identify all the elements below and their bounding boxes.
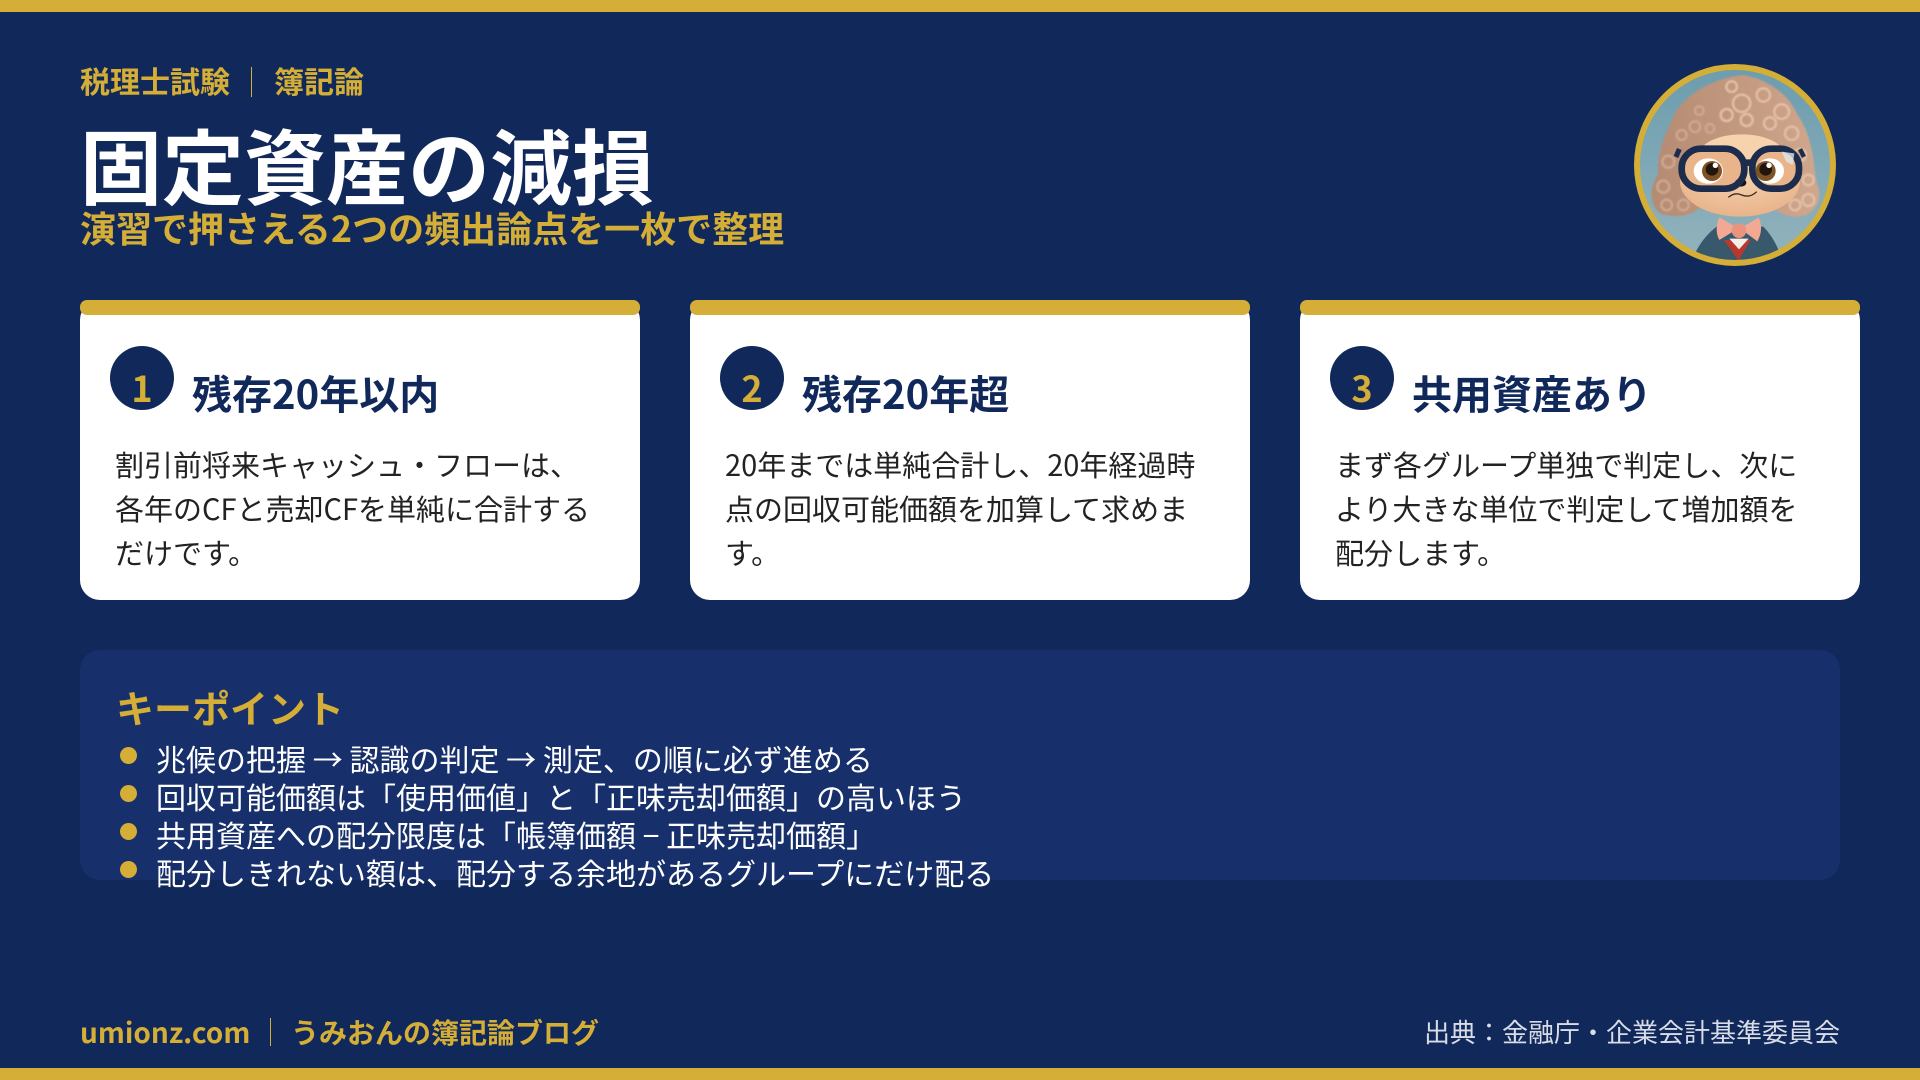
bullet list: 兆候の把握 → 認識の判定 → 測定、の順に必ず進める	[156, 736, 873, 780]
card 2 body: 20年までは単純合計し、20年経過時	[725, 443, 1195, 485]
bullet list	[120, 736, 994, 894]
face	[1680, 175, 1800, 217]
number badge 1: 1	[131, 361, 153, 413]
header label: exam and subject: 簿記論	[274, 58, 364, 102]
number badge 1	[110, 346, 174, 410]
panel: card 1	[80, 300, 640, 600]
eyes	[1694, 158, 1723, 184]
nose and mouth	[1735, 179, 1746, 187]
card 2 body: す。	[725, 531, 780, 573]
subtitle: 演習で押さえる2つの頻出論点を一枚で整理	[80, 201, 784, 253]
card 1 heading: 残存20年以内	[192, 363, 439, 421]
header label: exam and subject	[80, 58, 364, 102]
footer brand: umionz.com	[80, 1012, 250, 1052]
icon: mascot avatar	[1634, 64, 1836, 266]
card 3 body: より大きな単位で判定して増加額を	[1335, 487, 1798, 529]
footer brand: うみおんの簿記論ブログ	[291, 1012, 599, 1052]
card 1 body	[115, 443, 590, 573]
card 1 body: 各年のCFと売却CFを単純に合計する	[115, 487, 590, 529]
hair	[1652, 75, 1819, 217]
top accent bar	[0, 0, 1920, 12]
glasses	[1675, 149, 1804, 189]
footer source: 出典：金融庁・企業会計基準委員会	[1424, 1013, 1840, 1050]
bullet list: 回収可能価額は「使用価値」と「正味売却価額」の高いほう	[156, 774, 966, 818]
jacket	[1696, 226, 1778, 260]
card 3 heading: 共用資産あり	[1412, 363, 1652, 421]
bow tie	[1716, 218, 1734, 240]
key points heading: キーポイント	[116, 679, 344, 734]
card 3 body: まず各グループ単独で判定し、次に	[1335, 443, 1797, 485]
panel: key points background	[80, 650, 1840, 880]
card 1 body: 割引前将来キャッシュ・フローは、	[115, 443, 579, 485]
number badge 3: 3	[1351, 361, 1373, 413]
title: 固定資産の減損	[80, 103, 654, 222]
header label: exam and subject: 税理士試験	[80, 58, 230, 102]
card 2 heading: 残存20年超	[802, 363, 1009, 421]
bullet list: 共用資産への配分限度は「帳簿価額 − 正味売却価額」	[156, 812, 876, 856]
number badge 3	[1330, 346, 1394, 410]
number badge 2: 2	[741, 361, 763, 413]
number badge 2	[720, 346, 784, 410]
panel: card 2	[690, 300, 1250, 600]
lens tint	[1685, 152, 1741, 186]
card 1 body: だけです。	[115, 531, 257, 573]
bottom accent bar	[0, 1068, 1920, 1080]
card 2 body	[725, 443, 1195, 573]
card 3 body: 配分します。	[1335, 531, 1506, 573]
card 3 body	[1335, 443, 1798, 573]
footer brand	[80, 1012, 599, 1052]
panel: card 3	[1300, 300, 1860, 600]
card 2 body: 点の回収可能価額を加算して求めま	[725, 487, 1188, 529]
bullet list: 配分しきれない額は、配分する余地があるグループにだけ配る	[156, 850, 994, 894]
